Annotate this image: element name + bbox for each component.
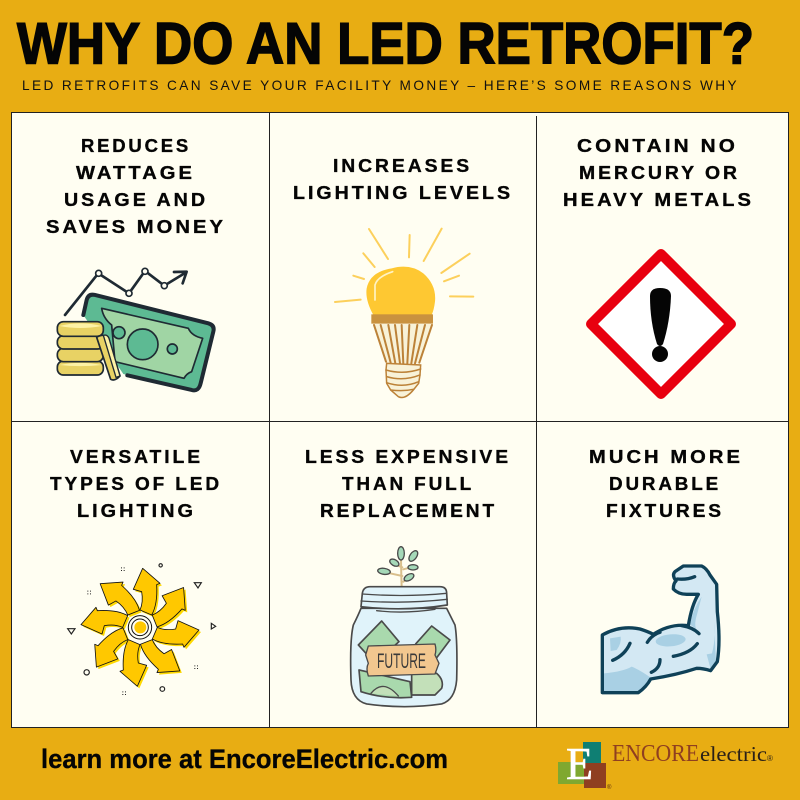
call to action: learn more at EncoreElectric.com xyxy=(41,744,448,774)
label: future: FUTURE xyxy=(377,650,426,673)
logo: Encore Electric: ® xyxy=(767,754,773,763)
icon: money jar labelled future xyxy=(351,547,457,707)
heading: much more durable: MUCH MORE xyxy=(589,446,743,467)
logo: Encore Electric: E xyxy=(566,738,593,789)
heading: contain no mercury xyxy=(563,135,754,210)
heading: increases lighting levels: LIGHTING LEVELS xyxy=(293,182,513,203)
icon: flexed bicep xyxy=(602,566,719,693)
subtitle: LED RETROFITS CAN SAVE YOUR FACILITY MONEY – HERE’S SOME REASONS WHY xyxy=(22,78,739,93)
icon: glowing LED bulb xyxy=(335,229,473,397)
icon: money and coins with rising chart xyxy=(57,268,214,390)
heading: reduces wattage xyxy=(46,135,226,237)
heading: much more durable: FIXTURES xyxy=(606,500,724,521)
heading: reduces wattage: WATTAGE xyxy=(76,162,195,183)
heading: versatile types xyxy=(50,446,222,521)
logo: Encore Electric: ENCORE xyxy=(612,741,699,767)
logo: Encore Electric xyxy=(558,738,773,791)
heading: contain no mercury: CONTAIN NO xyxy=(577,135,738,156)
heading: contain no mercury: HEAVY METALS xyxy=(563,189,754,210)
heading: increases lighting levels: INCREASES xyxy=(333,155,472,176)
heading: reduces wattage: REDUCES xyxy=(81,135,191,156)
heading: reduces wattage: SAVES MONEY xyxy=(46,216,226,237)
heading: less expensive xyxy=(305,446,511,521)
icon: radiating yellow arrows xyxy=(68,564,216,695)
icon: hazard warning diamond xyxy=(591,254,731,394)
heading: versatile types: LIGHTING xyxy=(77,500,196,521)
heading: less expensive: REPLACEMENT xyxy=(320,500,497,521)
heading: versatile types: TYPES OF LED xyxy=(50,473,222,494)
heading: much more durable: DURABLE xyxy=(609,473,721,494)
heading: much more durable xyxy=(589,446,743,521)
heading: reduces wattage: USAGE AND xyxy=(64,189,208,210)
heading: less expensive: THAN FULL xyxy=(342,473,474,494)
heading: contain no mercury: MERCURY OR xyxy=(579,162,740,183)
heading: increases lighting levels xyxy=(293,155,513,203)
heading: less expensive: LESS EXPENSIVE xyxy=(305,446,511,467)
logo: Encore Electric: ® xyxy=(607,784,612,791)
heading: versatile types: VERSATILE xyxy=(70,446,203,467)
panel: grid of six reasons xyxy=(12,112,789,728)
logo: Encore Electric: electric xyxy=(700,742,767,766)
